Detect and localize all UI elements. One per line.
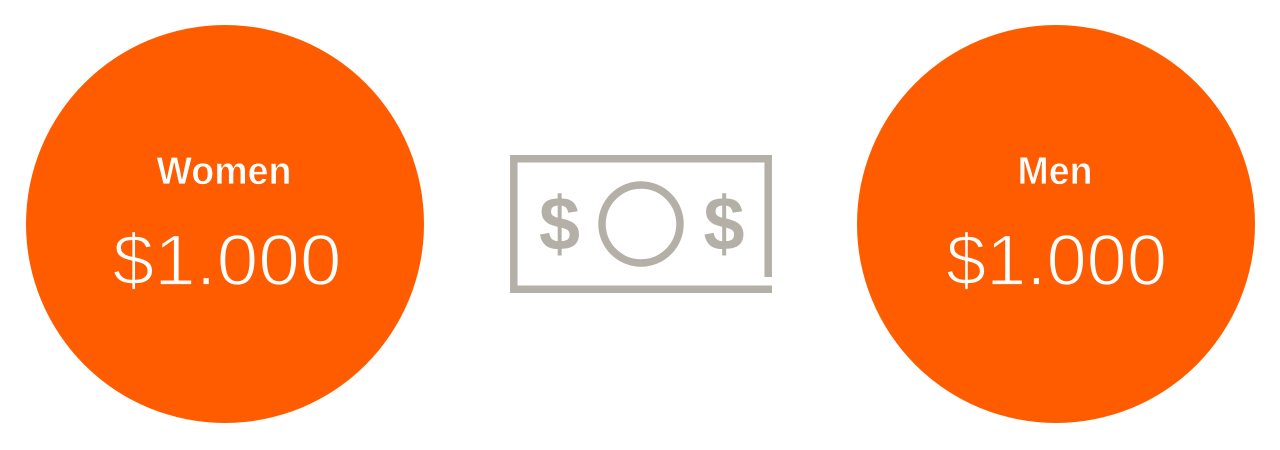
men amount: $1.000 [946,221,1167,301]
icon: dollar bill [514,159,772,289]
panel: women [26,25,424,423]
women circle [26,25,424,423]
left dollar sign: $ [539,182,580,267]
right dollar sign: $ [704,182,744,267]
bill outline [514,159,772,289]
bill centre circle [602,185,680,263]
women label: Women [156,150,292,193]
men label: Men [1018,150,1092,193]
women amount: $1.000 [112,221,342,301]
men circle [857,25,1255,423]
panel: men [857,25,1255,423]
